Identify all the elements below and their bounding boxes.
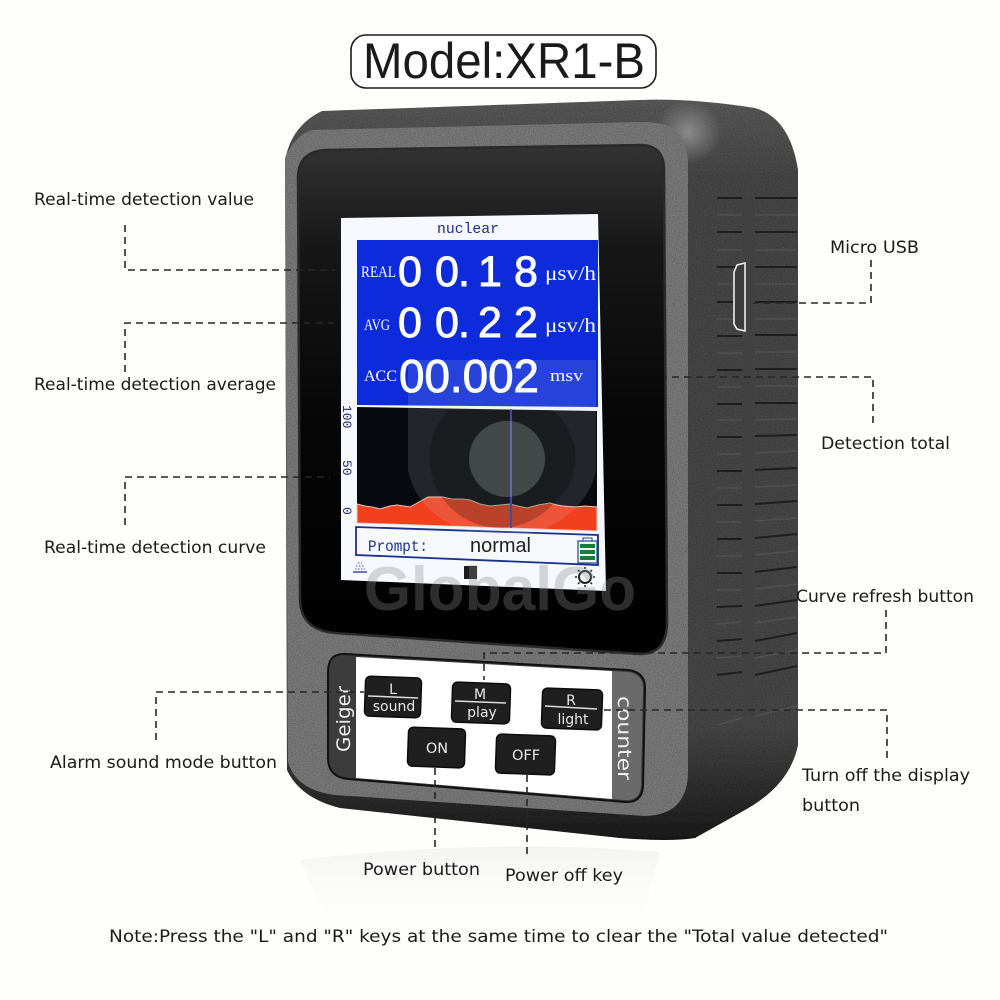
callout lines xyxy=(125,225,887,856)
R light button xyxy=(541,688,603,730)
front face xyxy=(285,122,688,816)
label: detection total: Detection total xyxy=(821,434,950,454)
icon: play stop square xyxy=(464,566,477,579)
side ribs xyxy=(717,197,797,725)
average value readout xyxy=(364,299,596,347)
average value readout: AVG xyxy=(364,317,390,334)
M play button: M xyxy=(474,687,486,703)
panel white insert xyxy=(356,657,612,799)
R light button: R xyxy=(566,693,576,709)
accumulated digits: msv xyxy=(550,366,584,385)
prompt status box xyxy=(356,527,598,565)
LCD title: nuclear xyxy=(437,221,499,238)
average value readout: 2 xyxy=(478,299,502,347)
right end cap xyxy=(612,671,643,800)
real value readout: . xyxy=(458,248,470,296)
ON button: ON xyxy=(426,741,448,757)
label: power button: Power button xyxy=(363,860,480,880)
icon: sound level xyxy=(353,563,367,572)
label: curve refresh button: Curve refresh button xyxy=(796,587,974,607)
average value readout: μsv/h xyxy=(545,315,596,337)
L sound button xyxy=(364,676,422,718)
label: real-time detection curve: Real-time detection curve xyxy=(44,538,266,558)
real value readout: μsv/h xyxy=(545,263,596,285)
L sound button: sound xyxy=(373,699,415,715)
device illustration xyxy=(285,100,798,840)
real value readout: 1 xyxy=(478,248,502,296)
R light button: light xyxy=(557,712,589,728)
curve chart background xyxy=(357,407,597,531)
watermark logo xyxy=(408,360,596,537)
blue readout panel xyxy=(357,240,598,407)
panel frame xyxy=(328,654,645,802)
real value readout xyxy=(361,248,596,296)
micro USB port xyxy=(734,263,745,331)
label: real-time detection value: Real-time detection value xyxy=(34,190,254,210)
prompt status box: normal xyxy=(470,535,531,557)
real value readout: 0 xyxy=(435,248,459,296)
real value readout: 8 xyxy=(514,248,538,296)
counter label: counter xyxy=(613,696,635,780)
icon: battery xyxy=(578,538,597,563)
M play button xyxy=(451,682,511,724)
accumulated digits: 00.002 xyxy=(399,350,539,402)
ON button xyxy=(407,727,466,768)
OFF button xyxy=(495,734,556,775)
curve cursor line xyxy=(510,409,512,528)
label: micro USB: Micro USB xyxy=(830,238,919,258)
OFF button: OFF xyxy=(512,748,540,764)
accumulated value label: ACC xyxy=(364,368,397,385)
red detection curve xyxy=(357,497,597,531)
LCD display xyxy=(339,214,606,591)
top corner highlight xyxy=(654,100,722,164)
chart axis labels: 50 xyxy=(339,460,354,476)
LCD background xyxy=(341,214,606,591)
M play button: play xyxy=(467,705,497,721)
screen bezel xyxy=(298,145,667,654)
note: Note:Press the "L" and "R" keys at the same time to clear the "Total value detected" xyxy=(109,927,888,947)
average value readout: 2 xyxy=(514,299,538,347)
real value readout: REAL xyxy=(361,264,396,281)
label: turn off the display button: button xyxy=(802,796,860,816)
title: model name: Model:XR1-B xyxy=(363,33,645,89)
label: real-time detection average: Real-time detection average xyxy=(34,375,276,395)
chart axis labels: 0 xyxy=(339,507,354,515)
average value readout: . xyxy=(458,299,470,347)
prompt status box: Prompt: xyxy=(368,538,428,556)
reflection under device xyxy=(300,847,660,925)
real value readout: 0 xyxy=(398,248,422,296)
watermark text: GlobalGo xyxy=(364,555,636,624)
Geiger label: Geiger xyxy=(333,686,355,752)
average value readout: 0 xyxy=(398,299,422,347)
average value readout: 0 xyxy=(435,299,459,347)
button panel xyxy=(328,654,645,802)
label: turn off the display button: Turn off the display xyxy=(801,766,970,786)
device body: side and back shell xyxy=(285,100,798,840)
label: alarm sound mode button: Alarm sound mode button xyxy=(50,753,277,773)
label: power off key: Power off key xyxy=(505,866,623,886)
chart axis labels xyxy=(339,405,354,515)
L sound button: L xyxy=(389,682,397,698)
chart axis labels: 100 xyxy=(339,405,354,428)
icon: brightness sun xyxy=(575,567,595,587)
